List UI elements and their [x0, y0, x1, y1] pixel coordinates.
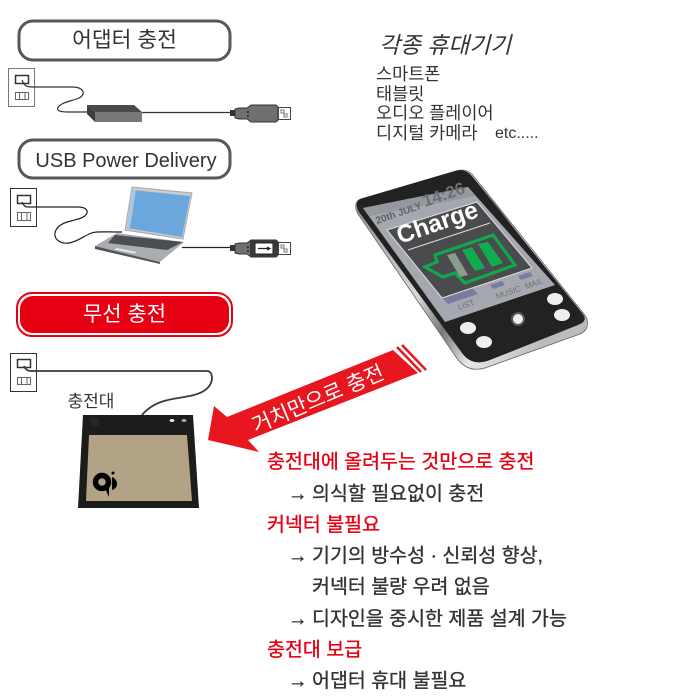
heading: portable devices: 각종 휴대기기	[379, 32, 513, 58]
benefits list: 의식할 필요없이 충전	[312, 483, 484, 505]
benefits list: 충전대 보급	[267, 639, 362, 661]
USB plug 2	[230, 240, 290, 257]
benefits list: →	[288, 670, 308, 692]
USB plug 1	[230, 105, 290, 122]
device list: 오디오 플레이어	[376, 103, 494, 123]
heading: USB Power Delivery	[19, 140, 230, 178]
laptop cable	[22, 202, 232, 248]
phone buttons	[460, 293, 570, 348]
benefits list: 충전대에 올려두는 것만으로 충전	[267, 451, 534, 473]
device list: 스마트폰	[376, 64, 440, 84]
heading: adapter charging	[19, 21, 230, 60]
benefits list: 커넥터 불필요	[267, 514, 380, 536]
device list: etc.....	[495, 125, 539, 142]
smartphone: LIST	[457, 298, 476, 312]
heading: USB Power Delivery: USB Power Delivery	[35, 150, 217, 172]
smartphone: 14:26	[420, 179, 467, 211]
wall outlet 3	[10, 354, 36, 392]
benefits list: 디자인을 중시한 제품 설계 가능	[312, 608, 567, 630]
device list: 태블릿	[376, 84, 424, 104]
smartphone: MAIL	[524, 276, 545, 291]
smartphone: MUSIC	[495, 284, 522, 301]
heading: wireless charging: 무선 충전	[83, 303, 166, 326]
device list: 디지털 카메라	[376, 123, 477, 143]
heading: adapter charging: 어댑터 충전	[72, 28, 177, 52]
smartphone: 20th JULY	[374, 201, 424, 227]
wall outlet 2	[10, 188, 36, 226]
red arrow: placement only charging	[208, 345, 426, 452]
smartphone	[356, 170, 588, 369]
wall outlet 1	[8, 68, 34, 106]
benefits list	[267, 451, 567, 692]
charging pad	[78, 415, 199, 508]
benefits list: →	[288, 608, 308, 630]
phone screen	[363, 187, 555, 322]
benefits list: 어댑터 휴대 불필요	[312, 670, 466, 692]
smartphone: Charge	[393, 197, 482, 250]
icon: qi logo	[96, 472, 117, 497]
benefits list: →	[288, 545, 308, 567]
benefits list: →	[288, 483, 308, 505]
device list	[376, 64, 539, 143]
power adapter	[87, 105, 142, 122]
benefits list: 기기의 방수성 · 신뢰성 향상,	[312, 545, 543, 567]
adapter cable	[22, 80, 232, 112]
heading: wireless charging	[17, 293, 232, 336]
charge panel	[387, 202, 532, 298]
red arrow: placement only charging: 거치만으로 충전	[249, 361, 388, 438]
benefits list: 커넥터 불량 우려 없음	[312, 576, 490, 598]
laptop	[95, 187, 192, 264]
charging pad cable	[24, 366, 212, 415]
battery icon	[425, 235, 515, 283]
label: charging pad: 충전대	[68, 392, 114, 411]
